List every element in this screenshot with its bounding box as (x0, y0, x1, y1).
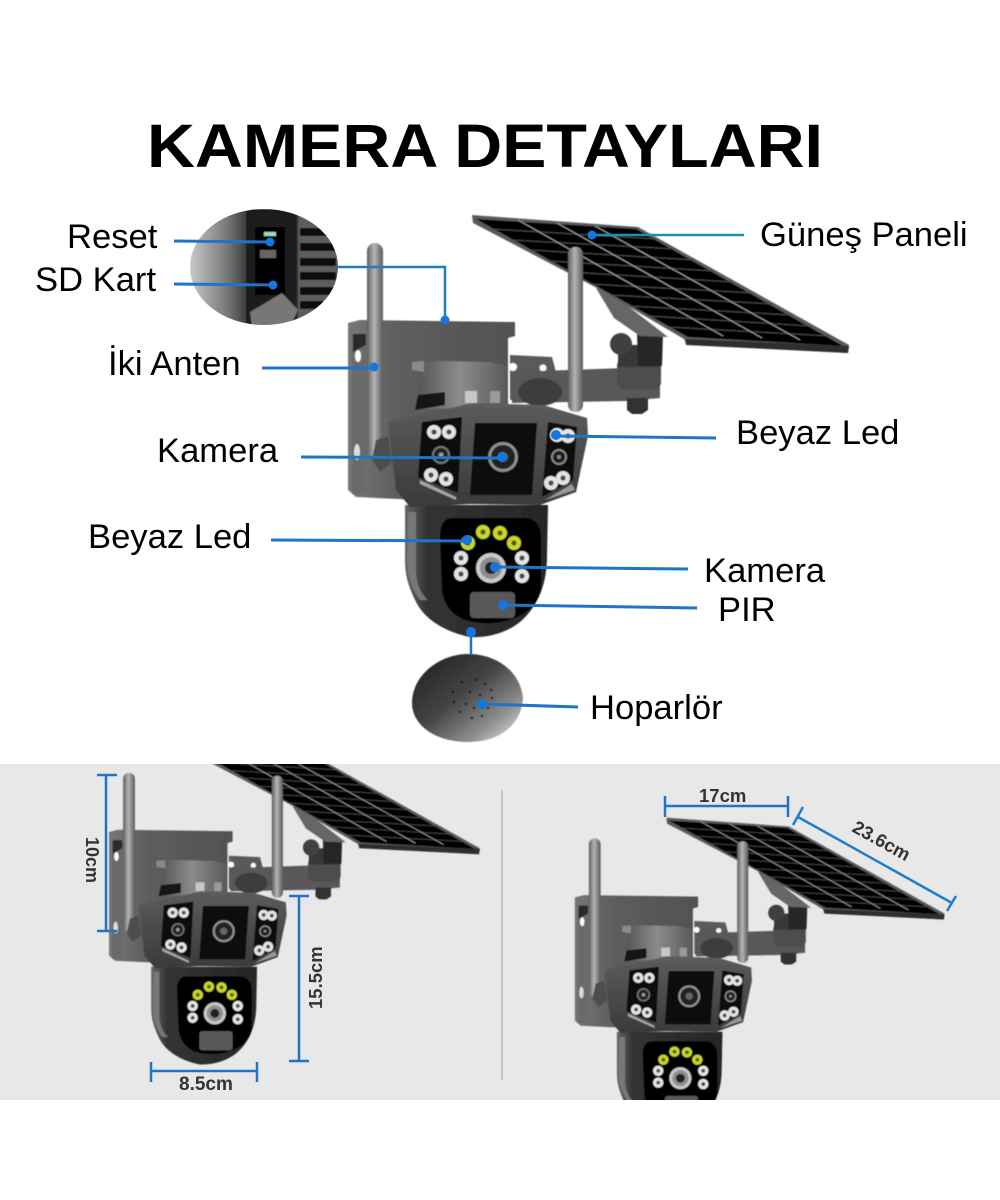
panel: camera with solar panel dimensions (575, 818, 945, 1129)
callout: Kamera upper (157, 432, 507, 470)
callout: Güneş Paneli (588, 216, 968, 254)
panel: dimensions background (0, 764, 1000, 1100)
callout: Reset: Reset (67, 218, 158, 256)
dimension: 10cm (82, 775, 117, 931)
dimension: 15.5cm: 15.5cm (305, 946, 326, 1009)
callout: Kamera lower (490, 552, 826, 590)
arrow: body to speaker (466, 627, 476, 655)
callout: Beyaz Led lower (88, 518, 472, 556)
dimension: 10cm: 10cm (82, 837, 102, 883)
callout: SD Kart (35, 261, 278, 299)
dimension: 17cm: 17cm (699, 785, 746, 806)
callout: PIR: PIR (718, 591, 776, 629)
dimension: 23.6cm (793, 807, 956, 911)
callout: Beyaz Led upper: Beyaz Led (736, 414, 899, 452)
icon: speaker dome (412, 654, 523, 742)
title: KAMERA DETAYLARI (147, 112, 823, 180)
main camera illustration (348, 215, 849, 637)
arrow: inset to mounting plate (338, 267, 450, 324)
dimension: 15.5cm (289, 896, 326, 1061)
callout: Hoparlör (477, 689, 723, 727)
dimension: 17cm (665, 785, 788, 817)
dimension: 23.6cm: 23.6cm (849, 816, 914, 865)
callout: İki Anten: İki Anten (108, 344, 241, 383)
dimension: 8.5cm (151, 1062, 257, 1095)
callout: Hoparlör: Hoparlör (590, 689, 723, 727)
callout: Beyaz Led lower: Beyaz Led (88, 518, 251, 556)
callout: Reset (67, 218, 274, 256)
callout: PIR (498, 591, 776, 629)
callout: Güneş Paneli: Güneş Paneli (760, 216, 968, 254)
callout: SD Kart: SD Kart (35, 261, 156, 299)
icon: inset detail of reset button and SD card slot (190, 209, 340, 327)
callout: Beyaz Led upper (551, 414, 899, 452)
callout: İki Anten (108, 344, 378, 383)
dimension: 8.5cm: 8.5cm (179, 1074, 233, 1095)
panel: camera with height and width dimensions (109, 752, 480, 1064)
callout: Kamera lower: Kamera (704, 552, 826, 590)
callout: Kamera upper: Kamera (157, 432, 279, 470)
